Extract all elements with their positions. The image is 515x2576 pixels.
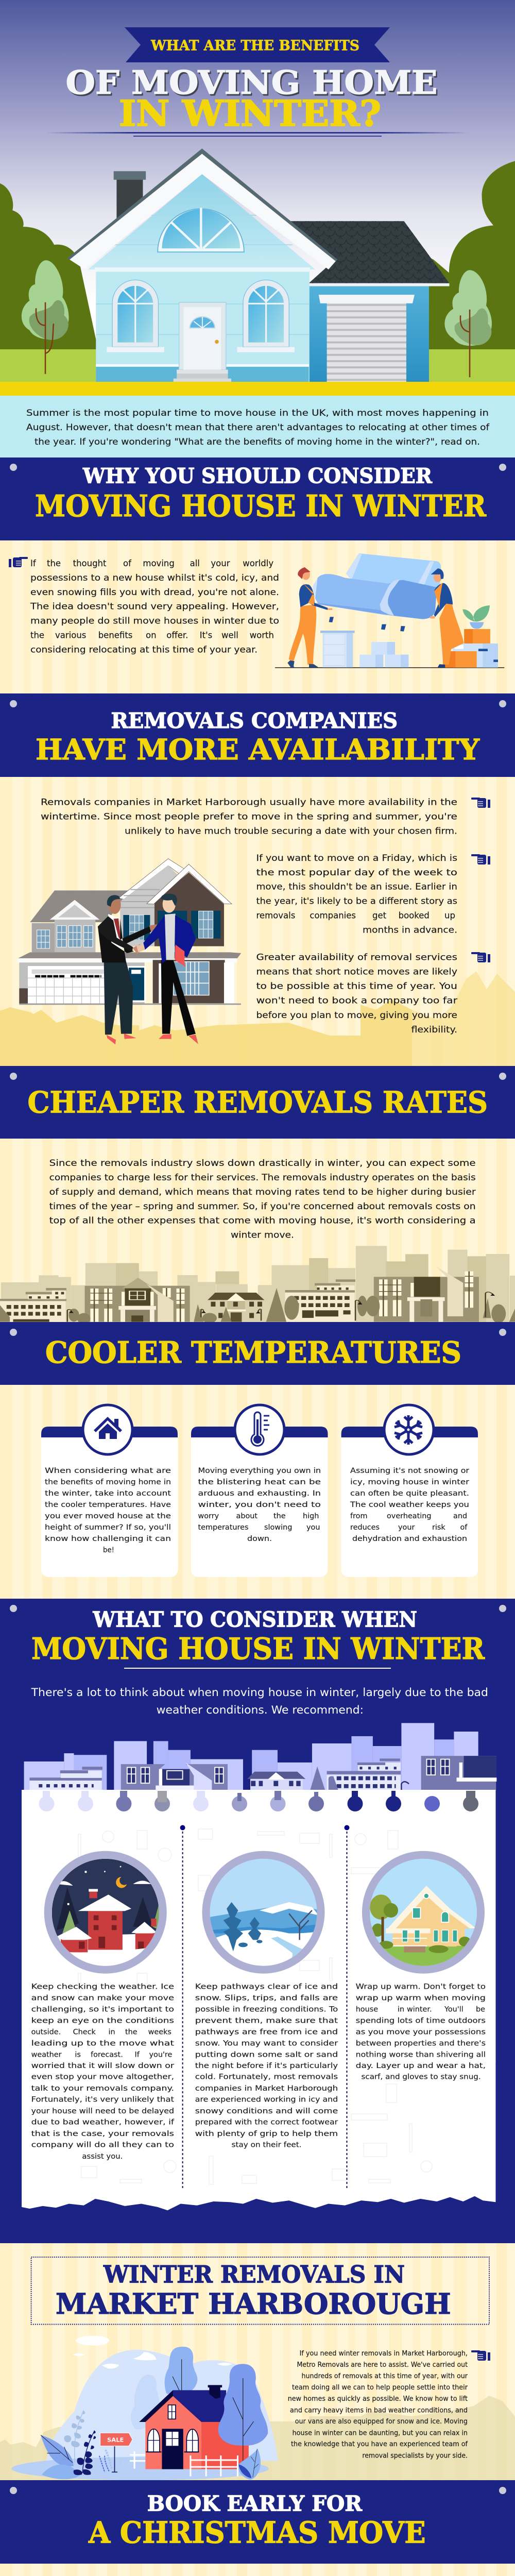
card: snowflake: The cool weather keeps you	[350, 1501, 469, 1509]
boxes and plant right	[445, 605, 498, 668]
why consider text	[30, 558, 279, 655]
why consider text: offer.	[166, 631, 188, 640]
tip column 2: snow. You may want to consider	[195, 2040, 338, 2048]
why consider text: If	[30, 558, 37, 568]
tip column 3: scarf, and gloves to stay snug.	[362, 2073, 481, 2081]
winter removals text: new homes as quickly as possible. We know how to lift	[288, 2395, 468, 2403]
section heading: why consider: MOVING HOUSE IN WINTER	[35, 489, 487, 523]
panel background: removals companies	[0, 777, 515, 1066]
winter removals text	[288, 2350, 468, 2460]
small tree right	[444, 270, 492, 377]
tip column 3: day. Layer up and wear a hat,	[356, 2062, 486, 2070]
panel background: cheaper rates	[0, 1139, 515, 1322]
why consider text: the	[30, 631, 44, 640]
section heading: book early	[0, 2480, 515, 2564]
tip column 1: company will do all they can to	[31, 2141, 174, 2149]
tip column 1: assist you.	[82, 2153, 123, 2161]
why consider text: benefits	[98, 631, 132, 640]
card: snowflake: icy, moving house in winter	[350, 1478, 469, 1486]
panel background: christmas move	[0, 2564, 515, 2576]
availability text 3: Greater availability of removal services	[256, 952, 457, 962]
lawn	[0, 349, 515, 382]
why consider text: the	[47, 558, 61, 568]
card: snowflake: and	[453, 1512, 467, 1520]
card: snowflake: from	[350, 1512, 368, 1520]
why consider text: many people do still move houses in winter due to	[30, 616, 279, 625]
tip column 1: leading up to the move what	[31, 2040, 174, 2048]
why consider text: your	[211, 558, 230, 568]
right building	[421, 1756, 496, 1790]
card: thermometer: temperatures	[198, 1523, 248, 1532]
card: thermometer: Moving everything you own in	[198, 1467, 321, 1475]
tip column 1: talk to your removals company.	[31, 2084, 174, 2093]
availability text 3	[256, 952, 457, 1035]
tip column 2: prepared with the correct footwear	[195, 2119, 338, 2127]
why consider text: well	[221, 631, 238, 640]
card: house: be!	[103, 1546, 114, 1554]
tip column 2: Keep pathways clear of ice and	[195, 1982, 338, 1991]
why consider text: all	[190, 558, 200, 568]
tip column 2: the night before if it's particularly	[195, 2062, 338, 2070]
availability text 1: unlikely to have much trouble securing a date with your chosen firm.	[125, 826, 457, 836]
man in black suit	[98, 895, 157, 1044]
heading: winter removals: WINTER REMOVALS IN	[103, 2261, 405, 2289]
availability text 2: move, this shouldn't be an issue. Earlier in	[256, 882, 457, 891]
section heading: cheaper removals rates: CHEAPER REMOVALS RATES	[28, 1085, 488, 1120]
tip column 3: spending lots of time outdoors	[356, 2017, 486, 2025]
section heading: why consider: WHY YOU SHOULD CONSIDER	[82, 464, 433, 488]
trees and lamps	[0, 1288, 515, 1324]
card: snowflake: of	[460, 1523, 468, 1532]
panel background: why consider	[0, 540, 515, 693]
card: house: know how challenging it can	[45, 1535, 171, 1543]
why consider text: considering relocating at this time of your year.	[30, 645, 258, 655]
suburban house	[18, 859, 241, 1005]
hand icons	[471, 798, 490, 962]
yellow city silhouette	[0, 971, 515, 1066]
card: snowflake	[341, 1405, 478, 1577]
lavender city skyline	[24, 1723, 496, 1791]
tip column 1: keep an eye on the conditions	[31, 2017, 174, 2025]
card: house	[41, 1405, 178, 1577]
roof fascia	[67, 148, 338, 269]
card: house: the cooler temperatures. Have	[45, 1501, 171, 1509]
why consider text: worldly	[243, 558, 273, 568]
tree right	[218, 2364, 268, 2480]
cheaper rates text: Since the removals industry slows down drastically in winter, you can expect some	[49, 1158, 476, 1168]
circle image: snowy night town	[44, 1851, 167, 1974]
panel: intro: August. However, that doesn't mean that there aren't advantages to relocating at other times of	[26, 422, 490, 432]
what to consider intro: weather conditions. We recommend:	[157, 1704, 364, 1716]
chimney	[114, 171, 146, 220]
card: thermometer: arduous and exhausting. In	[198, 1489, 321, 1498]
mid block	[121, 1756, 228, 1790]
ribbon: what are the benefits: WHAT ARE THE BENEFITS	[150, 38, 359, 54]
yellow band	[0, 382, 515, 396]
card: house: the benefits of moving home in	[45, 1478, 171, 1486]
section heading: removals companies	[0, 693, 515, 777]
winter removals text: our vans are also equipped for snow and ice. Moving	[295, 2418, 468, 2426]
card: snowflake: dehydration and exhaustion	[352, 1535, 467, 1543]
card: house: you ever moved house at the	[45, 1512, 171, 1520]
card: snowflake: can often be quite pleasant.	[350, 1489, 469, 1498]
tip column 1: Keep checking the weather. Ice	[31, 1982, 174, 1991]
availability text 2	[256, 853, 457, 935]
tip column 1: worried that it will slow down or	[31, 2062, 174, 2070]
beige city skyline	[0, 1246, 515, 1324]
availability text 3: before you plan to move, giving you more	[256, 1010, 457, 1020]
tip column 2: snowy conditions and will come	[195, 2107, 338, 2115]
cheaper rates text: of supply and demand, which means that moving rates tend to be higher during busier	[49, 1187, 476, 1197]
what to consider intro: There's a lot to think about when moving house in winter, largely due to the bad	[31, 1686, 488, 1699]
worker right	[430, 568, 464, 668]
what to consider intro	[31, 1686, 488, 1716]
ribbon: what are the benefits	[125, 27, 390, 62]
winter removals text: If you need winter removals in Market Harborough,	[300, 2350, 468, 2358]
title	[46, 63, 468, 137]
section heading: what to consider: MOVING HOUSE IN WINTER	[31, 1632, 485, 1666]
fence left	[130, 2451, 145, 2469]
winter removals text: removal specialists by your side.	[362, 2452, 468, 2460]
tip column 1: challenging, so it's important to	[31, 2005, 174, 2013]
tip column 3	[356, 1982, 486, 2081]
availability text 2: companies	[310, 911, 356, 920]
tip column 1	[31, 1982, 175, 2161]
faint background icons on paper	[78, 1829, 432, 2184]
tip column 3: between properties and there's	[356, 2040, 486, 2048]
tip column 1: the	[125, 2028, 138, 2036]
tip column 3: Wrap up warm. Don't forget to	[356, 1982, 486, 1991]
availability text 1: Removals companies in Market Harborough usually have more availability in the	[41, 798, 457, 807]
availability text 1	[41, 798, 457, 836]
house	[139, 2385, 249, 2469]
card: thermometer: winter, you don't need to	[198, 1501, 321, 1509]
panel: hero house scene	[0, 148, 515, 382]
card: thermometer: you	[306, 1523, 320, 1532]
tip column 2: companies in Market Harborough	[195, 2084, 338, 2093]
arched window	[158, 208, 244, 252]
tip column 2: cold. Fortunately, most removals	[195, 2073, 338, 2081]
panel background: winter removals	[0, 2243, 515, 2480]
winter removals text: team doing all we can to help people settle into their	[292, 2384, 468, 2392]
front door	[174, 302, 231, 382]
icon: thermometer	[251, 1412, 269, 1446]
garage	[290, 221, 450, 382]
tip column 1: outside.	[31, 2028, 61, 2036]
tip column 1: in	[108, 2028, 115, 2036]
card: snowflake: Assuming it's not snowing or	[350, 1467, 469, 1475]
availability text 2: the year, it's likely to be a different story as	[256, 896, 457, 906]
tip column 1: Check	[73, 2028, 96, 2036]
card: snowflake: risk	[432, 1523, 445, 1532]
man in blue blazer	[136, 894, 198, 1044]
dotted dividers	[180, 1825, 349, 2189]
availability text 2: If you want to move on a Friday, which is	[256, 853, 457, 863]
hand icon	[471, 2350, 490, 2361]
card: thermometer: about	[236, 1512, 258, 1520]
card: thermometer: down.	[247, 1535, 272, 1543]
tip column 1: even stop your move altogether,	[31, 2073, 174, 2081]
why consider text: on	[146, 631, 157, 640]
why consider text: The idea doesn't sound very appealing. However,	[30, 602, 279, 611]
cheaper rates text: times of the year – spring and summer. So, if you're concerned about removals costs on	[49, 1201, 476, 1211]
availability text 2: removals	[256, 911, 295, 920]
section heading: why consider	[0, 457, 515, 540]
card: snowflake: your	[398, 1523, 415, 1532]
card: snowflake: overheating	[387, 1512, 432, 1520]
why consider text: even snowing fills you with dread, you're not alone.	[30, 587, 279, 597]
background trees	[0, 161, 515, 351]
villa	[208, 1293, 264, 1322]
why consider text: moving	[143, 558, 175, 568]
title: OF MOVING HOME	[66, 63, 438, 101]
tip column 2	[195, 1982, 338, 2149]
card: thermometer: slowing	[264, 1523, 292, 1532]
mid block	[85, 1278, 190, 1322]
winter removals text: house in winter can be daunting, but you can relax in	[293, 2429, 468, 2437]
tip column 1: weeks	[148, 2028, 171, 2036]
availability text 3: flexibility.	[411, 1025, 457, 1035]
tip column 1: Fortunately, it's very unlikely that	[31, 2096, 174, 2104]
section heading: cooler temperatures	[0, 1322, 515, 1385]
section heading: what to consider: WHAT TO CONSIDER WHEN	[93, 1607, 417, 1632]
tip column 3: You'll	[444, 2005, 464, 2013]
section heading: cooler temperatures: COOLER TEMPERATURES	[45, 1335, 461, 1370]
torn paper panel	[22, 1790, 495, 2210]
why consider text: thought	[73, 558, 107, 568]
tip column 2: prevent them, make sure that	[195, 2017, 338, 2025]
tip column 3: in	[398, 2005, 404, 2013]
section heading: removals companies: REMOVALS COMPANIES	[111, 708, 398, 733]
tip column 1: is	[75, 2050, 81, 2059]
tip column 2: pathways are free from ice and	[195, 2028, 338, 2036]
why consider text: It's	[200, 631, 212, 640]
why consider text: possessions to a new house whilst it's cold, icy, and	[30, 573, 279, 583]
icon: house	[94, 1417, 122, 1439]
fence right	[190, 2455, 238, 2477]
card: thermometer: the	[273, 1512, 286, 1520]
panel: intro: the year. If you're wondering "What are the benefits of moving home in the winter?", read on.	[35, 437, 480, 447]
cheaper rates text	[49, 1158, 476, 1240]
title: IN WINTER?	[119, 93, 381, 134]
section heading: cheaper removals rates	[0, 1066, 515, 1139]
villa	[247, 1772, 305, 1790]
title: OF MOVING HOME	[67, 65, 439, 103]
availability text 2: months in advance.	[363, 925, 457, 935]
availability text 1: wintertime. Since most people prefer to move in the spring and summer, you're	[41, 812, 457, 822]
availability text 2: booked	[399, 911, 430, 920]
plants	[41, 2410, 123, 2479]
tip column 2: snow. Slips, trips, and falls are	[195, 1994, 338, 2003]
section heading: what to consider	[10, 1605, 506, 1669]
notched circles in paper edge	[39, 1791, 478, 1811]
tip column 1: and snow can make your move	[31, 1994, 174, 2003]
card: house: the winter, take into account	[45, 1489, 171, 1498]
sale sign: SALE	[107, 2436, 124, 2443]
right building	[374, 1266, 479, 1322]
section heading: book early: BOOK EARLY FOR	[147, 2492, 363, 2516]
tip column 1: your house will need to be delayed	[31, 2107, 174, 2115]
card: thermometer: the blistering heat can be	[198, 1478, 321, 1486]
tip column 3: wrap up warm when moving	[356, 1994, 486, 2003]
small tree left	[22, 260, 69, 374]
right lower block	[285, 1279, 355, 1322]
card: thermometer: worry	[198, 1512, 219, 1520]
window right	[237, 280, 295, 352]
tip column 1: forecast.	[91, 2050, 123, 2059]
cabinet	[320, 631, 355, 667]
winter removals text: and carry heavy items in bad weather conditions, and	[290, 2406, 468, 2414]
availability text 2: get	[372, 911, 387, 920]
availability text 3: won't need to book a company too far	[256, 996, 457, 1006]
circle image: snowy landscape	[202, 1851, 325, 1974]
window left	[107, 280, 164, 352]
tip column 2: are experienced working in icy and	[195, 2096, 338, 2104]
sale sign	[100, 2433, 132, 2472]
tip column 2: possible in freezing conditions. To	[195, 2005, 338, 2013]
beige city silhouette	[0, 2396, 515, 2480]
card: snowflake: reduces	[350, 1523, 380, 1532]
icon: snowflake	[394, 1415, 422, 1445]
why consider text: of	[123, 558, 132, 568]
panel: intro: Summer is the most popular time to move house in the UK, with most moves happening in	[26, 408, 489, 418]
left block	[0, 1288, 66, 1322]
tip column 1: you're	[149, 2050, 172, 2059]
tip column 1: weather	[31, 2050, 62, 2059]
tip column 1: If	[135, 2050, 140, 2059]
tip column 1: that is the case, your removals	[31, 2130, 174, 2138]
stacked boxes	[359, 642, 408, 667]
cheaper rates text: companies to charge less for their services. The removals industry operates on the basis	[49, 1173, 476, 1182]
tip column 3: nothing worse than shivering all	[356, 2050, 486, 2059]
availability text 2: the most popular day of the week to	[256, 868, 457, 877]
tip column 2: with plenty of grip to help them	[195, 2130, 338, 2138]
hand icon	[9, 557, 28, 567]
why consider text: various	[55, 631, 86, 640]
why consider text: worth	[250, 631, 274, 640]
tip column 2: putting down some salt or sand	[195, 2050, 338, 2059]
panel: hero sky	[0, 0, 515, 355]
heading: winter removals: MARKET HARBOROUGH	[56, 2287, 451, 2320]
winter removals text: the knowledge that you have an experienced team of	[291, 2441, 468, 2448]
tip column 2: stay on their feet.	[232, 2141, 302, 2149]
worker left	[287, 567, 332, 668]
section heading: book early: A CHRISTMAS MOVE	[88, 2516, 426, 2550]
tip column 3: winter.	[407, 2005, 432, 2013]
panel: intro	[0, 396, 515, 457]
cone tree and right block	[310, 1758, 401, 1790]
section heading: removals companies: HAVE MORE AVAILABILITY	[36, 733, 480, 766]
cheaper rates text: winter move.	[231, 1230, 294, 1240]
illustration: handshake in front of house	[18, 859, 241, 1044]
tip column 3: house	[356, 2005, 378, 2013]
left block	[29, 1767, 102, 1790]
illustration: red house for sale	[11, 2336, 278, 2480]
circle image: yellow house	[362, 1851, 485, 1974]
panel background: cooler temperatures	[0, 1385, 515, 1599]
card: house: height of summer? If so, you'll	[45, 1523, 171, 1532]
section background: what to consider	[0, 1599, 515, 2243]
winter removals text: hundreds of removals at this time of year, with our	[302, 2372, 468, 2380]
tip column 3: as you move your possessions	[356, 2028, 486, 2036]
tip column 1: due to bad weather, however, if	[31, 2119, 175, 2127]
house body	[88, 174, 315, 382]
card: house: When considering what are	[45, 1467, 171, 1475]
availability text 3: to be possible at this time of year. You	[256, 981, 457, 991]
winter removals text: Metro Removals are here to assist. We've carried out	[297, 2361, 468, 2369]
availability text 2: up	[444, 911, 455, 920]
heading: winter removals	[31, 2257, 489, 2325]
illustration: movers carrying sofa	[275, 553, 504, 668]
card: thermometer	[191, 1405, 328, 1577]
card: thermometer: high	[303, 1512, 319, 1520]
cheaper rates text: top of all the other expenses that come with moving house, it's worth considering a	[49, 1216, 476, 1225]
availability text 3: means that short notice moves are likely	[256, 967, 457, 977]
tip column 3: be	[476, 2005, 485, 2013]
